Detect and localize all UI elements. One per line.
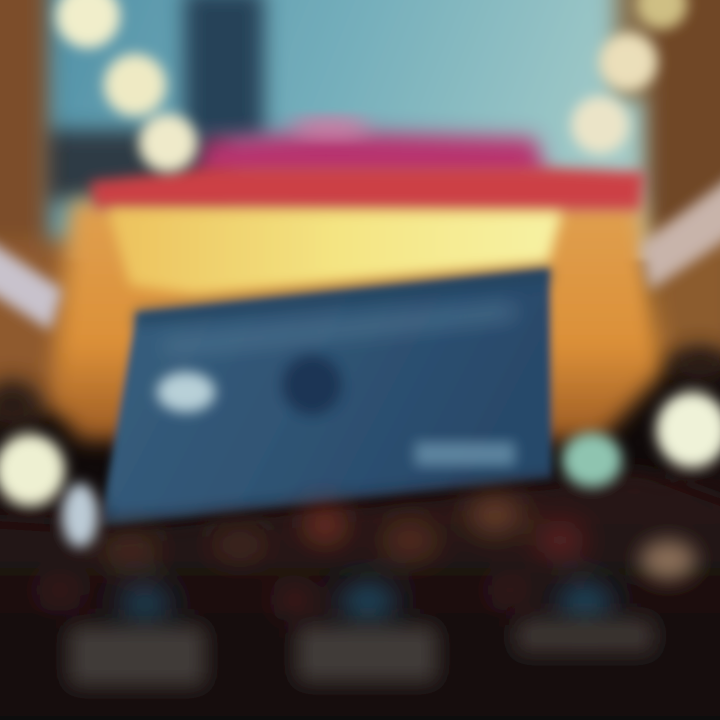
magenta roof band <box>195 132 548 180</box>
awning left <box>0 235 62 330</box>
string lights right <box>571 0 687 154</box>
caption block centre <box>296 625 438 683</box>
pale figure right <box>640 540 696 580</box>
right building <box>615 0 720 360</box>
small lamp <box>62 483 98 547</box>
sky <box>0 0 720 260</box>
card logo <box>157 372 215 412</box>
yellow banner <box>108 209 562 294</box>
left building <box>0 0 80 410</box>
lamp left <box>0 434 65 506</box>
card top shade <box>134 268 550 326</box>
caption block right <box>515 618 655 654</box>
teal lamp <box>562 433 622 487</box>
horizon haze <box>40 130 230 200</box>
lamp right <box>656 392 720 468</box>
dark shadows beside arch <box>0 345 720 560</box>
awning right <box>640 170 720 290</box>
orange arch backdrop <box>50 200 665 440</box>
credit card <box>100 268 552 526</box>
caption block left <box>68 625 206 687</box>
card text line <box>165 304 515 354</box>
pink peak <box>290 119 370 137</box>
heads and colours <box>40 501 613 618</box>
card emblem <box>282 355 342 415</box>
card number <box>415 442 515 466</box>
string lights left <box>56 0 197 172</box>
dark tower <box>184 0 264 140</box>
red band <box>90 168 645 210</box>
crowd <box>0 470 720 720</box>
